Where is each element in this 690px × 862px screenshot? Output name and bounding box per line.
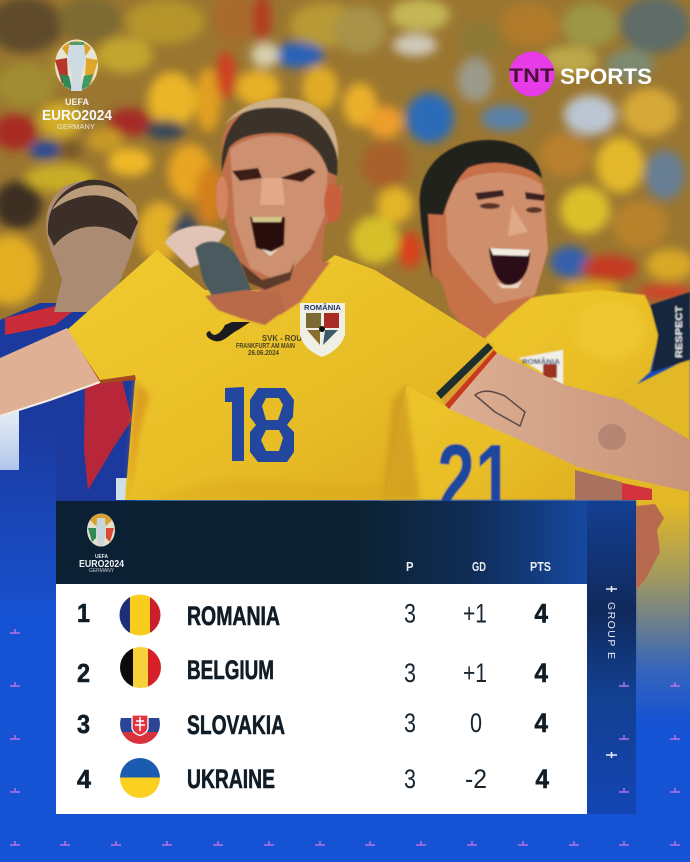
row: Slovakia: SLOVAKIA bbox=[187, 710, 285, 740]
photo: tattooed arm around neck bbox=[165, 226, 285, 325]
photo: player 21 bbox=[380, 140, 690, 720]
row: Slovakia: 4 bbox=[534, 708, 548, 738]
logo: UEFA EURO 2024: EURO2024 bbox=[42, 107, 113, 124]
row: Slovakia: 3 bbox=[77, 709, 90, 739]
icon: Slovakia flag bbox=[120, 716, 160, 744]
row: Romania: 4 bbox=[534, 598, 548, 628]
photo: blurred stadium crowd bbox=[0, 0, 690, 330]
logo: small EURO 2024: EURO2024 bbox=[79, 559, 124, 570]
row: Belgium: 2 bbox=[77, 658, 90, 688]
table panel bbox=[56, 501, 636, 814]
row: Belgium: BELGIUM bbox=[187, 655, 274, 685]
logo: UEFA EURO 2024: UEFA bbox=[65, 97, 89, 107]
row: Ukraine: 4 bbox=[77, 764, 92, 794]
row: Belgium: +1 bbox=[463, 658, 487, 688]
row: Romania: +1 bbox=[463, 598, 487, 628]
row: Ukraine: -2 bbox=[465, 764, 487, 794]
panel: group strip bbox=[587, 501, 636, 814]
logo: UEFA EURO 2024 bbox=[42, 40, 113, 131]
row: Belgium: 4 bbox=[534, 658, 548, 688]
photo: Slovakia player from behind bbox=[0, 180, 138, 600]
row: Slovakia: 3 bbox=[404, 708, 416, 738]
photo: main player body and shirt 18: SVK - ROU bbox=[262, 334, 302, 343]
photo: player 21: 21 bbox=[437, 424, 513, 536]
photo: main player body and shirt 18: FRANKFURT AM MAIN bbox=[236, 343, 295, 350]
pattern: pink tick marks bbox=[10, 629, 680, 845]
column heading: GD: GD bbox=[472, 560, 486, 574]
logo: small EURO 2024: GERMANY bbox=[89, 568, 115, 574]
photo: main player body and shirt 18: 26.06.2024 bbox=[248, 350, 279, 357]
row: Ukraine bbox=[77, 757, 549, 798]
photo: outstretched arms bbox=[0, 328, 690, 500]
group label: GROUP E bbox=[605, 602, 617, 659]
fade: photo dissolving into blue at lower left bbox=[0, 420, 56, 660]
logo: TNT Sports bbox=[509, 52, 652, 96]
group label bbox=[605, 586, 617, 758]
photo: main player body and shirt 18 bbox=[67, 250, 497, 500]
icon: Belgium flag bbox=[119, 647, 162, 689]
logo: UEFA EURO 2024: GERMANY bbox=[57, 122, 95, 131]
bottom blue field bbox=[0, 815, 690, 862]
logo: small EURO 2024 bbox=[79, 514, 124, 574]
column heading: P: P bbox=[406, 560, 414, 574]
icon: Romania crest: ROMÂNIA bbox=[304, 303, 341, 312]
row: Belgium: 3 bbox=[404, 658, 416, 688]
row: Slovakia: 0 bbox=[470, 708, 482, 738]
icon: Romania flag bbox=[119, 594, 161, 636]
row: Ukraine: 4 bbox=[536, 764, 549, 794]
row: Slovakia bbox=[77, 713, 548, 744]
photo: fist beside panel bbox=[636, 504, 664, 590]
panel: dark header band bbox=[56, 501, 587, 584]
row: Romania: ROMANIA bbox=[187, 601, 280, 631]
row: Ukraine: UKRAINE bbox=[187, 764, 275, 794]
fade: photo dissolving into blue at lower right bbox=[636, 505, 690, 721]
row: Belgium bbox=[77, 647, 548, 689]
photo: main player head bbox=[216, 98, 343, 315]
column heading: PTS: PTS bbox=[530, 560, 551, 574]
logo: TNT Sports: SPORTS bbox=[560, 64, 652, 89]
photo: player 21: RESPECT bbox=[674, 305, 684, 358]
panel: white table body bbox=[56, 584, 587, 814]
row: Romania: 1 bbox=[77, 598, 90, 628]
row: Romania: 3 bbox=[404, 598, 416, 628]
row: Ukraine: 3 bbox=[404, 764, 416, 794]
number 18 bbox=[225, 387, 294, 462]
logo: small EURO 2024: UEFA bbox=[95, 554, 108, 560]
icon: Romania crest bbox=[300, 303, 345, 357]
row: Romania bbox=[77, 594, 548, 636]
icon: Ukraine flag bbox=[119, 757, 161, 798]
photo: player 21: ROMÂNIA bbox=[522, 357, 561, 366]
logo: TNT Sports: TNT bbox=[509, 66, 554, 87]
